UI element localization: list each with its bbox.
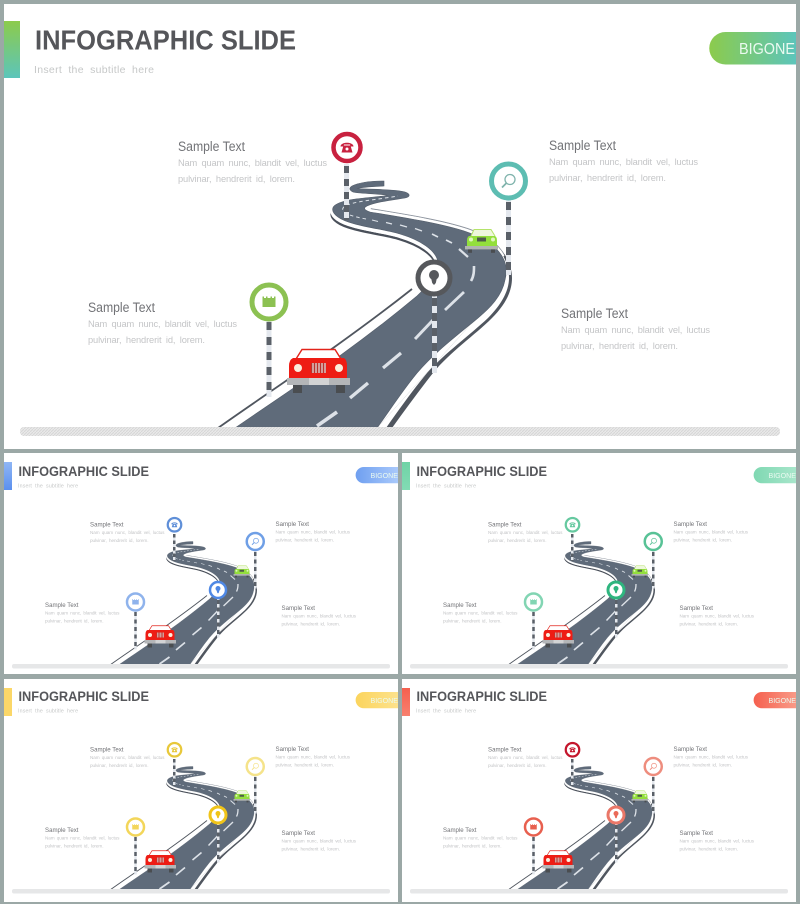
winding road — [508, 542, 655, 665]
pin: magnifier — [645, 758, 662, 814]
pin: magnifier — [247, 533, 264, 588]
text block: top left: pulvinar, hendrerit id, lorem. — [90, 538, 148, 543]
red car — [542, 626, 574, 648]
subtitle: Insert the subtitle here — [416, 708, 476, 714]
brand pill: BIGONE — [768, 471, 796, 480]
slide background — [402, 453, 796, 674]
blue slide — [4, 453, 398, 674]
pin: brick — [252, 285, 286, 397]
title: INFOGRAPHIC SLIDE — [18, 689, 149, 704]
accent bar — [4, 688, 12, 716]
subtitle: Insert the subtitle here — [416, 484, 476, 490]
text block: lower left: Sample Text — [443, 827, 477, 834]
text block: top right — [674, 521, 749, 542]
title: INFOGRAPHIC SLIDE — [416, 464, 547, 479]
text block: top right: pulvinar, hendrerit id, lorem. — [674, 538, 732, 542]
slide background — [4, 679, 398, 902]
text block: top left: Sample Text — [488, 522, 522, 528]
text block: lower right: Nam quam nunc, blandit vel, luctus — [282, 614, 357, 618]
text block: top right: Nam quam nunc, blandit vel, luctus — [674, 754, 749, 760]
red car — [144, 851, 176, 872]
slide background — [402, 679, 796, 902]
pin: phone — [168, 743, 181, 786]
green car — [234, 566, 250, 577]
text block: lower left: pulvinar, hendrerit id, lorem. — [443, 618, 502, 624]
text block: lower right: Nam quam nunc, blandit vel, luctus — [680, 614, 755, 618]
text block: top left: pulvinar, hendrerit id, lorem. — [178, 174, 295, 184]
pin: magnifier — [645, 533, 662, 588]
accent bar — [402, 462, 410, 490]
subtitle: Insert the subtitle here — [18, 708, 78, 714]
text block: top right: Sample Text — [674, 521, 707, 528]
text block: lower left: Nam quam nunc, blandit vel, luctus — [45, 836, 120, 840]
ground strip — [12, 889, 390, 894]
text block: top left: Sample Text — [90, 746, 124, 754]
winding road — [218, 181, 512, 428]
text block: lower left: Sample Text — [88, 300, 155, 315]
pin: magnifier — [492, 164, 526, 275]
text block: top right: Nam quam nunc, blandit vel, luctus — [276, 530, 351, 534]
pin: light bulb — [210, 582, 226, 638]
pin: light bulb — [608, 807, 624, 862]
text block: lower right: Nam quam nunc, blandit vel, luctus — [561, 325, 710, 335]
ground strip — [12, 664, 390, 668]
text block: top right: pulvinar, hendrerit id, lorem. — [276, 762, 334, 768]
text block: lower left: Nam quam nunc, blandit vel, luctus — [88, 319, 237, 329]
green car — [632, 791, 648, 802]
text block: top right: Sample Text — [276, 746, 309, 753]
text block: lower left: pulvinar, hendrerit id, lorem. — [88, 335, 205, 345]
text block: lower right: Sample Text — [282, 605, 315, 612]
text block: top right: Nam quam nunc, blandit vel, luctus — [549, 157, 698, 167]
slide background — [4, 453, 398, 674]
text block: top left: Sample Text — [488, 746, 522, 754]
text block: top left: Nam quam nunc, blandit vel, luctus — [90, 755, 165, 760]
text block: top left — [90, 746, 165, 768]
red car — [542, 851, 574, 872]
text block: lower right: Nam quam nunc, blandit vel, luctus — [282, 838, 357, 844]
text block: lower right: pulvinar, hendrerit id, lorem. — [680, 622, 738, 626]
red slide — [402, 679, 796, 902]
brand pill: BIGONE — [370, 696, 398, 705]
subtitle: Insert the subtitle here — [34, 64, 154, 76]
green slide — [402, 453, 796, 674]
text block: top right: pulvinar, hendrerit id, lorem. — [276, 538, 334, 542]
winding road — [110, 542, 257, 665]
text block: top right: pulvinar, hendrerit id, lorem. — [674, 762, 732, 768]
text block: lower left — [443, 827, 518, 848]
title: INFOGRAPHIC SLIDE — [416, 689, 547, 704]
brand pill — [356, 467, 398, 483]
text block: lower right: Sample Text — [561, 306, 628, 321]
main slide — [4, 4, 796, 449]
red car — [287, 350, 350, 393]
text block: top left — [488, 522, 563, 543]
pin: brick — [127, 594, 144, 650]
accent bar — [402, 688, 410, 716]
winding road — [110, 766, 257, 890]
pin: light bulb — [210, 807, 226, 862]
text block: lower right: pulvinar, hendrerit id, lorem. — [282, 622, 340, 626]
yellow slide — [4, 679, 398, 902]
accent bar — [4, 462, 12, 490]
text block: lower right — [680, 830, 755, 852]
ground strip — [20, 427, 780, 436]
text block: top left: Nam quam nunc, blandit vel, luctus — [488, 755, 563, 760]
brand pill — [356, 692, 398, 708]
accent bar — [4, 21, 20, 78]
pin: brick — [525, 818, 542, 874]
text block: top right — [674, 746, 749, 768]
green car — [465, 230, 498, 253]
text block: top right: Sample Text — [276, 521, 309, 528]
text block: lower left: pulvinar, hendrerit id, lorem. — [443, 844, 502, 848]
pin: phone — [168, 518, 181, 561]
subtitle: Insert the subtitle here — [18, 484, 78, 490]
text block: lower left: Sample Text — [45, 827, 79, 834]
text block: top left: Nam quam nunc, blandit vel, luctus — [488, 530, 563, 535]
text block: top left: pulvinar, hendrerit id, lorem. — [90, 763, 148, 768]
green car — [632, 566, 648, 577]
text block: lower left: Sample Text — [443, 602, 477, 609]
text block: lower right — [680, 605, 755, 626]
text block: lower left — [88, 300, 237, 345]
brand pill — [754, 692, 796, 708]
brand pill — [709, 32, 796, 64]
text block: lower right: pulvinar, hendrerit id, lorem. — [561, 341, 678, 351]
text block: top left: pulvinar, hendrerit id, lorem. — [488, 763, 546, 768]
text block: top right: Nam quam nunc, blandit vel, luctus — [276, 754, 351, 760]
text block: lower left: Sample Text — [45, 602, 79, 609]
text block: top right: Sample Text — [674, 746, 707, 753]
text block: lower left: Nam quam nunc, blandit vel, luctus — [443, 836, 518, 840]
text block: lower left: Nam quam nunc, blandit vel, luctus — [443, 610, 518, 616]
text block: lower left: Nam quam nunc, blandit vel, luctus — [45, 610, 120, 616]
text block: lower left: pulvinar, hendrerit id, lorem. — [45, 618, 104, 624]
text block: top left: pulvinar, hendrerit id, lorem. — [488, 538, 546, 543]
text block: lower right: Sample Text — [680, 830, 713, 837]
text block: top left: Sample Text — [90, 522, 124, 528]
text block: lower right — [561, 306, 710, 351]
text block: lower right: Sample Text — [680, 605, 713, 612]
red car — [144, 626, 176, 648]
text block: top right — [549, 138, 698, 183]
text block: lower right: pulvinar, hendrerit id, lorem. — [680, 846, 738, 852]
text block: top left — [90, 522, 165, 543]
text block: lower left — [45, 827, 120, 848]
text block: lower left — [443, 602, 518, 624]
pin: phone — [566, 743, 579, 786]
text block: top right: pulvinar, hendrerit id, lorem. — [549, 173, 666, 183]
text block: top right — [276, 521, 351, 542]
text block: lower left: pulvinar, hendrerit id, lorem. — [45, 844, 104, 848]
text block: top right: Nam quam nunc, blandit vel, luctus — [674, 530, 749, 534]
title: INFOGRAPHIC SLIDE — [18, 464, 149, 479]
text block: top left — [178, 139, 327, 184]
text block: top left: Sample Text — [178, 139, 245, 154]
brand pill — [754, 467, 796, 483]
slide background — [4, 4, 796, 449]
ground strip — [410, 889, 788, 894]
text block: top left: Nam quam nunc, blandit vel, luctus — [90, 530, 165, 535]
brand pill: BIGONE — [370, 471, 398, 480]
text block: lower right: pulvinar, hendrerit id, lorem. — [282, 846, 340, 852]
brand pill: BIGONE — [768, 696, 796, 705]
text block: lower right — [282, 830, 357, 852]
pin: brick — [525, 594, 542, 650]
text block: lower right — [282, 605, 357, 626]
text block: lower left — [45, 602, 120, 624]
text block: lower right: Nam quam nunc, blandit vel, luctus — [680, 838, 755, 844]
text block: lower right: Sample Text — [282, 830, 315, 837]
text block: top left — [488, 746, 563, 768]
pin: phone — [334, 134, 360, 220]
title: INFOGRAPHIC SLIDE — [35, 24, 296, 56]
text block: top right: Sample Text — [549, 138, 616, 153]
green car — [234, 791, 250, 802]
pin: magnifier — [247, 758, 264, 814]
ground strip — [410, 664, 788, 668]
text block: top right — [276, 746, 351, 768]
winding road — [508, 766, 655, 890]
text block: top left: Nam quam nunc, blandit vel, luctus — [178, 158, 327, 168]
pin: brick — [127, 818, 144, 874]
pin: phone — [566, 518, 579, 561]
brand pill: BIGONE — [739, 41, 795, 58]
pin: light bulb — [418, 262, 450, 373]
pin: light bulb — [608, 582, 624, 638]
